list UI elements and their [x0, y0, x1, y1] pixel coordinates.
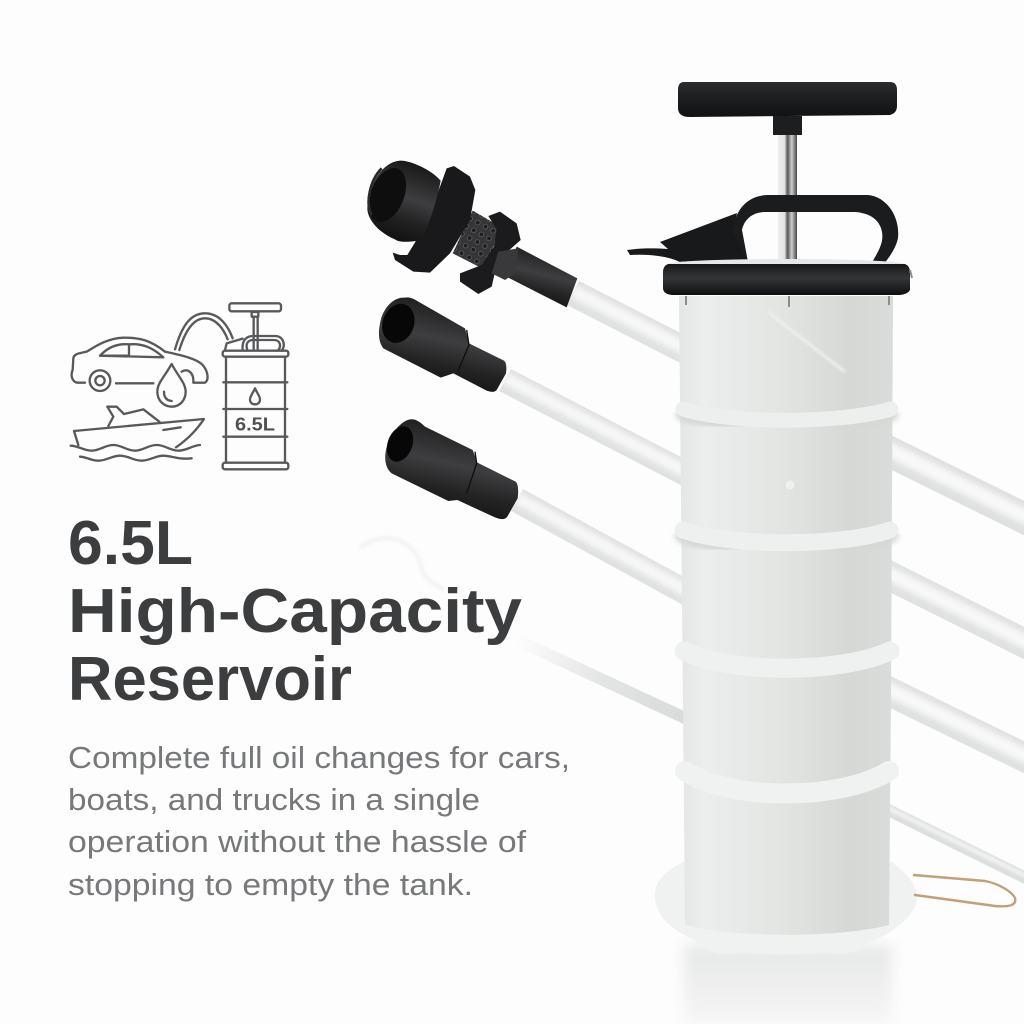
description text: Complete full oil changes for cars,	[68, 740, 570, 775]
chrome rod	[778, 134, 797, 266]
description text: operation without the hassle of	[68, 824, 526, 859]
icon: car, boat and pump with 6.5L drum	[71, 303, 288, 469]
silver lid top	[668, 259, 904, 269]
icon: car	[72, 338, 208, 391]
attachment connectors	[361, 161, 577, 519]
icon: hose	[175, 313, 233, 350]
tank centre dimple	[786, 480, 794, 490]
icon: boat	[71, 407, 204, 461]
heading: 6.5L	[68, 509, 193, 578]
description text: stopping to empty the tank.	[68, 867, 473, 902]
floor shadow under tank	[684, 945, 892, 1024]
connector: strainer nozzle	[361, 161, 577, 307]
T-handle	[678, 82, 897, 117]
tube 2	[505, 378, 1024, 651]
tank body	[679, 296, 893, 935]
pour spout	[627, 213, 748, 265]
tank scratch highlight	[768, 312, 845, 372]
tube 3	[517, 498, 1024, 765]
icon: oil drop	[157, 364, 186, 407]
lid ring	[663, 264, 910, 295]
connector: small adapter	[382, 419, 518, 519]
icon: pump drum	[223, 303, 288, 469]
pump tank	[655, 296, 917, 954]
description text: boats, and trucks in a single	[68, 782, 480, 817]
faint coiled tube arc	[360, 538, 445, 590]
tube 1	[573, 291, 1024, 526]
lid screws	[686, 270, 912, 307]
heading	[68, 509, 523, 714]
tube 4	[517, 640, 1024, 885]
description text	[68, 740, 570, 902]
carry handle loop	[733, 195, 898, 264]
tank base flange	[655, 862, 917, 954]
icon: pump drum: 6.5L	[235, 414, 275, 435]
pump top	[627, 82, 912, 307]
tank ribs	[683, 409, 891, 794]
heading: High-Capacity	[68, 577, 523, 646]
heading: Reservoir	[68, 645, 352, 714]
brass wire loop	[914, 875, 1015, 906]
connector: large adapter	[377, 297, 506, 392]
handle collar	[773, 116, 802, 135]
suction tubes	[360, 291, 1024, 885]
